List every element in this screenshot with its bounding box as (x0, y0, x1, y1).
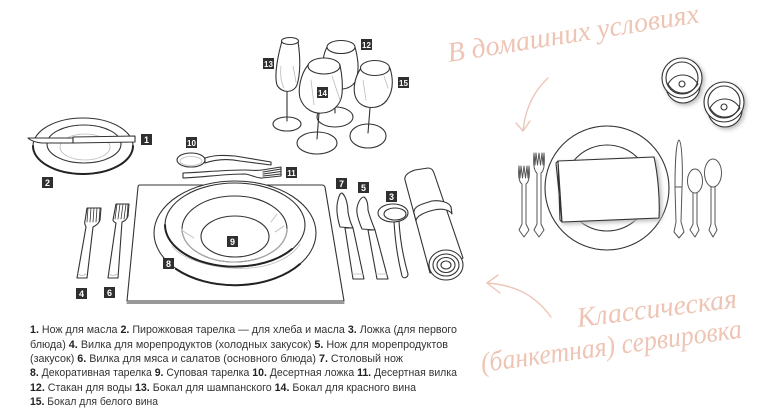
icon: dessert fork (183, 167, 281, 178)
label 15: 15 (399, 79, 408, 88)
label 8 (163, 258, 174, 269)
label 6: 6 (107, 288, 112, 298)
icon: decorative plate (154, 181, 316, 285)
text block: legend: (закусок) 6. Вилка для мяса и салатов (основного блюда) 7. Столовый нож (30, 353, 404, 365)
text block: legend: блюда) 4. Вилка для морепродуктов (холодных закусок) 5. Нож для морепродуктов (30, 339, 448, 351)
label 7: 7 (339, 179, 344, 189)
label 13 (263, 58, 274, 69)
icon: soup spoon (378, 204, 408, 278)
icon: home small spoon (688, 169, 702, 237)
icon: main fork (108, 204, 129, 278)
icon: home napkin (556, 157, 659, 222)
label 5 (358, 182, 369, 193)
label 3 (386, 191, 397, 202)
label 2: 2 (45, 178, 50, 188)
icon: home knife (674, 140, 684, 238)
icon: home large fork (534, 153, 544, 237)
heading: classic setting line 2: (банкетная) сервировка (479, 314, 744, 379)
label 10: 10 (187, 139, 196, 148)
icon: white wine glass (350, 60, 392, 148)
text block: legend (30, 324, 458, 408)
label 2 (42, 177, 53, 188)
heading: classic setting line 1: Классическая (574, 284, 739, 334)
icon: champagne flute (273, 38, 301, 131)
label 5: 5 (361, 183, 366, 193)
label 13: 13 (264, 60, 273, 69)
label 12 (361, 39, 372, 50)
label 14: 14 (318, 89, 327, 98)
icon: home large spoon (704, 159, 722, 237)
label 11: 11 (287, 169, 296, 178)
icon: seafood fork (77, 208, 101, 278)
icon: rolled napkin (405, 168, 463, 280)
icon: home small fork (519, 166, 529, 237)
label 8: 8 (166, 259, 171, 269)
arrow: to home setting (516, 78, 548, 131)
label 14 (317, 87, 328, 98)
icon: butter knife (28, 136, 135, 143)
label 15 (398, 77, 409, 88)
panel: placemat (127, 185, 344, 303)
label 11 (286, 167, 297, 178)
label 9 (227, 236, 238, 247)
icon: bread plate (33, 118, 133, 174)
arrow: to classic setting (487, 275, 551, 317)
icon: dessert spoon (177, 153, 271, 167)
icon: table knife (337, 193, 364, 279)
label 1 (141, 134, 152, 145)
text block: legend: 8. Декоративная тарелка 9. Суповая тарелка 10. Десертная ложка 11. Десертная вилка (30, 367, 458, 379)
label 4 (76, 288, 87, 299)
label 12: 12 (362, 41, 371, 50)
text block: legend: 15. Бокал для белого вина (30, 396, 159, 408)
icon: red wine glass (297, 58, 342, 154)
icon: home plate (545, 126, 669, 250)
label 4: 4 (79, 289, 84, 299)
text block: legend: 1. Нож для масла 2. Пирожковая тарелка — для хлеба и масла 3. Ложка (для первого (30, 324, 457, 336)
label 10 (186, 137, 197, 148)
icon: seafood knife (357, 197, 388, 279)
label 9: 9 (230, 237, 235, 247)
label 7 (336, 178, 347, 189)
icon: soup plate (165, 183, 305, 268)
label 1: 1 (144, 135, 149, 145)
text block: legend: 12. Стакан для воды 13. Бокал для шампанского 14. Бокал для красного вина (30, 382, 417, 394)
heading: at home: В домашних условиях (445, 0, 702, 69)
icon: water glass (317, 40, 358, 127)
icon: home water glass left (662, 58, 702, 103)
label 6 (104, 287, 115, 298)
icon: home water glass right (704, 82, 744, 127)
label 3: 3 (389, 192, 394, 202)
